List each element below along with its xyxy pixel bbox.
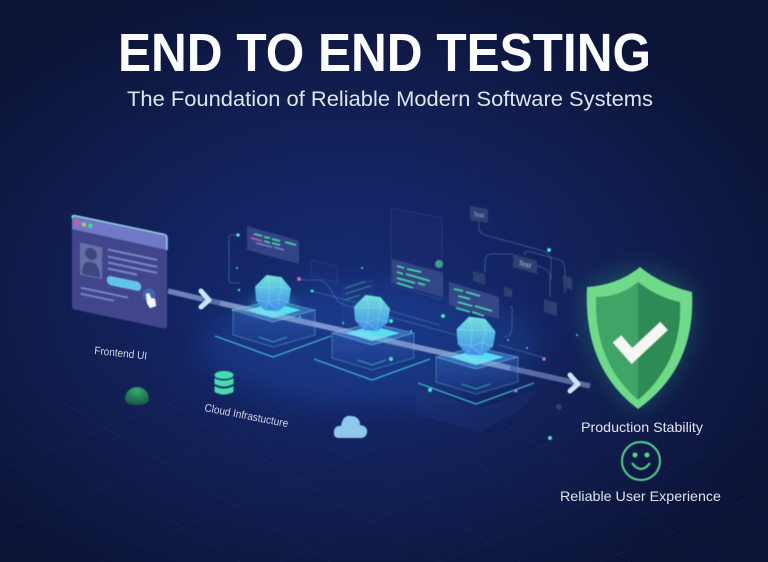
label: Reliable User Experience: Reliable User Experience	[560, 488, 721, 504]
label: Frontend UI: Frontend UI	[94, 345, 148, 363]
icon: crystal 2	[355, 296, 389, 330]
accent dots	[297, 260, 562, 410]
test node 1: Test	[473, 212, 485, 220]
small nodes	[473, 271, 572, 316]
icon: crystal 1	[251, 276, 295, 313]
icon: smiley	[622, 442, 660, 480]
icon: green dome	[125, 387, 149, 405]
panel: frontend browser window	[72, 215, 167, 329]
title: END TO END TESTING	[118, 23, 651, 83]
test node 2: Test	[518, 260, 532, 270]
code card 3	[449, 282, 499, 319]
label: Cloud Infrastucture: Cloud Infrastucture	[203, 402, 289, 430]
icon: crystal 3	[458, 318, 494, 354]
circuit connectors	[229, 222, 565, 358]
code card 2	[392, 259, 443, 297]
test node 2	[513, 254, 537, 274]
ghost panels	[311, 208, 442, 325]
stage platform 3	[418, 318, 534, 404]
subtitle: The Foundation of Reliable Modern Software Systems	[127, 88, 653, 111]
label: Production Stability: Production Stability	[581, 419, 703, 435]
central glow	[200, 285, 540, 405]
icon: database	[214, 371, 234, 394]
icon: shield with check	[587, 267, 692, 409]
code card 1	[247, 226, 299, 264]
shield glow	[587, 270, 692, 409]
illustration: testing pipeline	[72, 206, 692, 480]
flow arrow over platforms	[220, 303, 510, 368]
stage platform 1	[215, 276, 331, 357]
icon: cloud	[334, 416, 367, 438]
glow dots	[232, 233, 578, 440]
test node 1	[470, 206, 488, 223]
data flow arrow	[168, 291, 590, 391]
stage platform 2	[314, 296, 430, 380]
small code lines	[345, 281, 370, 300]
perspective floor grid	[0, 340, 768, 562]
icon: cursor button	[142, 288, 156, 308]
lower plate	[416, 388, 540, 432]
